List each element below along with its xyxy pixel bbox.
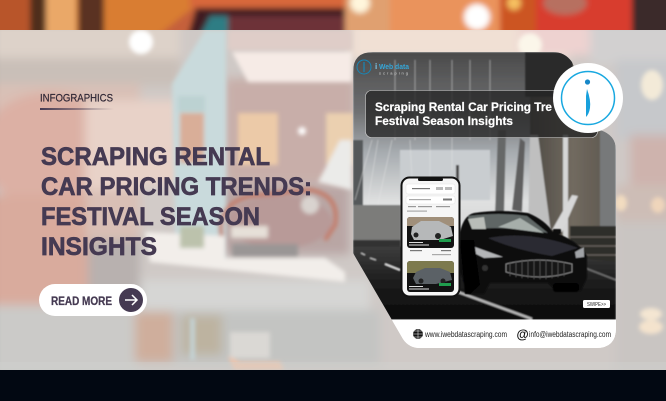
main heading: INSIGHTS [41, 233, 157, 261]
eyebrow label [40, 92, 114, 110]
white contact strip [392, 320, 616, 348]
brand logo: Web data [379, 64, 409, 71]
phone search controls [406, 184, 455, 204]
brand badge circle [553, 63, 623, 133]
title box [366, 90, 598, 138]
read more button [39, 284, 147, 316]
swipe tag [583, 300, 610, 308]
email contact: info@iwebdatascraping.com [529, 330, 611, 339]
email contact [517, 330, 611, 340]
blurred photo strip at top [0, 0, 666, 30]
brand logo: i [375, 62, 377, 71]
email contact: @ [516, 328, 529, 342]
main heading: SCRAPING RENTAL [41, 143, 270, 171]
title box: Festival Season Insights [375, 116, 513, 128]
phone listing two [407, 261, 454, 292]
read more button: READ MORE [51, 296, 112, 308]
eyebrow label: INFOGRAPHICS [40, 92, 113, 104]
brand logo [357, 60, 409, 76]
social post card [353, 52, 616, 348]
main heading [41, 143, 312, 261]
smartphone mockup [402, 178, 460, 296]
main heading: CAR PRICING TRENDS: [41, 173, 312, 201]
phone listing one [407, 217, 454, 248]
main heading: FESTIVAL SEASON [41, 203, 260, 231]
dark footer band [0, 370, 666, 401]
sports car [459, 211, 587, 294]
website contact [413, 329, 507, 339]
card photo: bridge and road [353, 52, 616, 348]
website contact: www.iwebdatascraping.com [424, 330, 507, 339]
brand logo: scraping [379, 70, 408, 76]
swipe tag: SWIPE>> [587, 302, 606, 308]
title box: Scraping Rental Car Pricing Tre [375, 102, 552, 114]
